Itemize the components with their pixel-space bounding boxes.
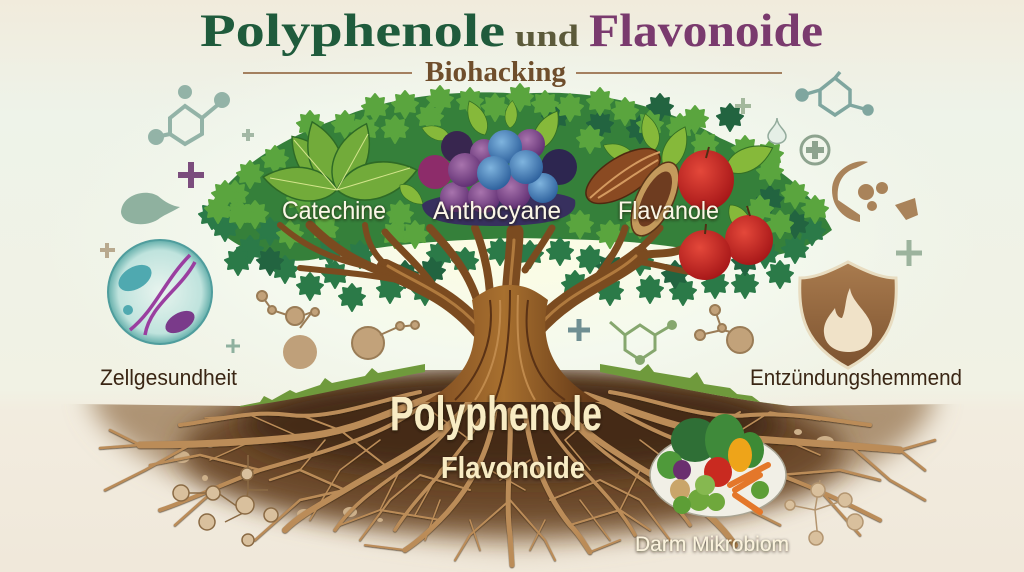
label: Polyphenole: Polyphenole <box>390 388 602 441</box>
icon: small plus lower <box>226 339 240 353</box>
trunk <box>425 285 600 402</box>
label: Flavonoide: Flavonoide <box>441 450 585 485</box>
label: Darm Mikrobiom: Darm Mikrobiom <box>635 533 789 556</box>
branches <box>280 225 690 330</box>
label: Flavanole: Flavanole <box>618 197 719 225</box>
icon: tan molecule centre <box>352 321 419 359</box>
soil pebbles <box>174 429 834 522</box>
icon: flask <box>768 118 786 144</box>
icon: plus right <box>735 98 751 114</box>
icon: sage plus <box>896 240 922 266</box>
roots <box>100 392 935 565</box>
title: Flavonoide <box>589 5 823 57</box>
icon: tan bowl <box>832 161 918 222</box>
title: und <box>515 18 579 53</box>
icon: cell with DNA <box>108 240 212 344</box>
icon: molecule top left <box>150 87 228 144</box>
icon: vegetable plate <box>650 414 786 517</box>
title <box>200 5 823 57</box>
icon: small plus left <box>100 243 115 258</box>
label: Entzündungshemmend: Entzündungshemmend <box>750 365 962 390</box>
icon: flame shield <box>800 262 896 368</box>
cacao pods <box>577 138 689 243</box>
grass <box>240 364 790 407</box>
icon: tan molecule right <box>695 305 753 353</box>
branch highlights <box>388 240 636 326</box>
icon: plus <box>242 129 254 141</box>
icon: sage blob <box>121 193 180 224</box>
leaves: catechine <box>260 116 421 207</box>
trunk bark <box>455 290 565 400</box>
apples <box>678 147 773 280</box>
icon: green molecule <box>610 322 676 364</box>
icon: molecule top right <box>797 72 872 115</box>
soil molecule right <box>785 480 863 545</box>
soil <box>90 372 935 545</box>
soil molecule left <box>173 455 278 546</box>
icon: tan blob <box>283 335 317 369</box>
title: Polyphenole <box>200 5 505 57</box>
label: Zellgesundheit: Zellgesundheit <box>100 365 237 390</box>
icon: tan molecule left <box>257 291 319 328</box>
icon: slate plus <box>568 319 590 341</box>
label: Anthocyane: Anthocyane <box>433 197 561 225</box>
icon: plus in circle <box>801 136 829 164</box>
canopy: foliage <box>199 84 832 311</box>
leaves: berries and fruit backing <box>396 98 777 243</box>
subtitle: Biohacking: Biohacking <box>425 57 566 88</box>
icon: purple plus <box>178 162 204 188</box>
label: Catechine: Catechine <box>282 197 386 225</box>
berries <box>418 129 577 226</box>
